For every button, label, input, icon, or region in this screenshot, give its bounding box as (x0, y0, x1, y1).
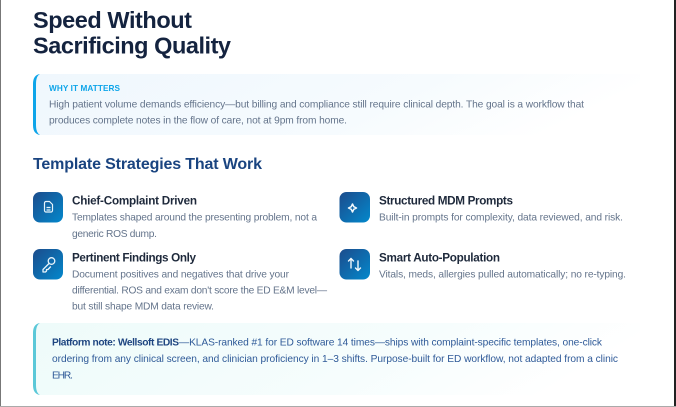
item: chief-complaint driven: Chief-Complaint Driven (72, 194, 197, 208)
callout body text: produces complete notes in the flow of care, not at 9pm from home. (49, 116, 347, 126)
icon: key (33, 249, 63, 280)
platform note text: EHR. (52, 370, 73, 382)
item: smart auto-population: Smart Auto-Population (379, 252, 500, 264)
item: pertinent findings only: differential. ROS and exam don't score the ED E&M level— (72, 286, 328, 296)
item: pertinent findings only: but still shape MDM data review. (72, 302, 214, 312)
platform note text (52, 338, 618, 382)
callout: platform note (33, 323, 640, 395)
icon: sparkle (340, 192, 370, 222)
item: pertinent findings only (33, 249, 328, 312)
item: smart auto-population (340, 249, 626, 280)
item: structured mdm prompts: Structured MDM Prompts (379, 194, 513, 208)
item: chief-complaint driven: generic ROS dump. (72, 229, 157, 240)
item: chief-complaint driven: Templates shaped around the presenting problem, not a (72, 212, 317, 224)
item: pertinent findings only: Pertinent Findings Only (72, 252, 196, 264)
item: structured mdm prompts: Built-in prompts for complexity, data reviewed, and risk. (379, 212, 623, 224)
item: chief-complaint driven (33, 192, 317, 240)
callout label: WHY IT MATTERS (49, 84, 121, 93)
callout body text: High patient volume demands efficiency—but billing and compliance still require clinical depth. The goal is a workflow that (49, 100, 584, 110)
title: Sacrificing Quality (33, 32, 231, 58)
item: smart auto-population: Vitals, meds, allergies pulled automatically; no re-typing. (379, 270, 626, 280)
icon: document (33, 192, 63, 222)
callout: why it matters (33, 74, 640, 135)
platform note text: ordering from any clinical screen, and clinician proficiency in 1–3 shifts. Purpose-built for ED workflow, not adapted from a clinic (52, 354, 618, 365)
platform note text: Platform note: Wellsoft EDIS (52, 338, 179, 348)
item: structured mdm prompts (340, 192, 623, 224)
title: Speed Without (33, 7, 192, 33)
callout body text (49, 100, 584, 126)
item: pertinent findings only: Document positives and negatives that drive your (72, 270, 290, 280)
title (33, 7, 231, 58)
icon: up and down arrows (340, 249, 370, 280)
section heading: Template Strategies That Work (33, 156, 262, 173)
platform note text: —KLAS-ranked #1 for ED software 14 times—ships with complaint-specific templates, one-click (179, 338, 603, 348)
